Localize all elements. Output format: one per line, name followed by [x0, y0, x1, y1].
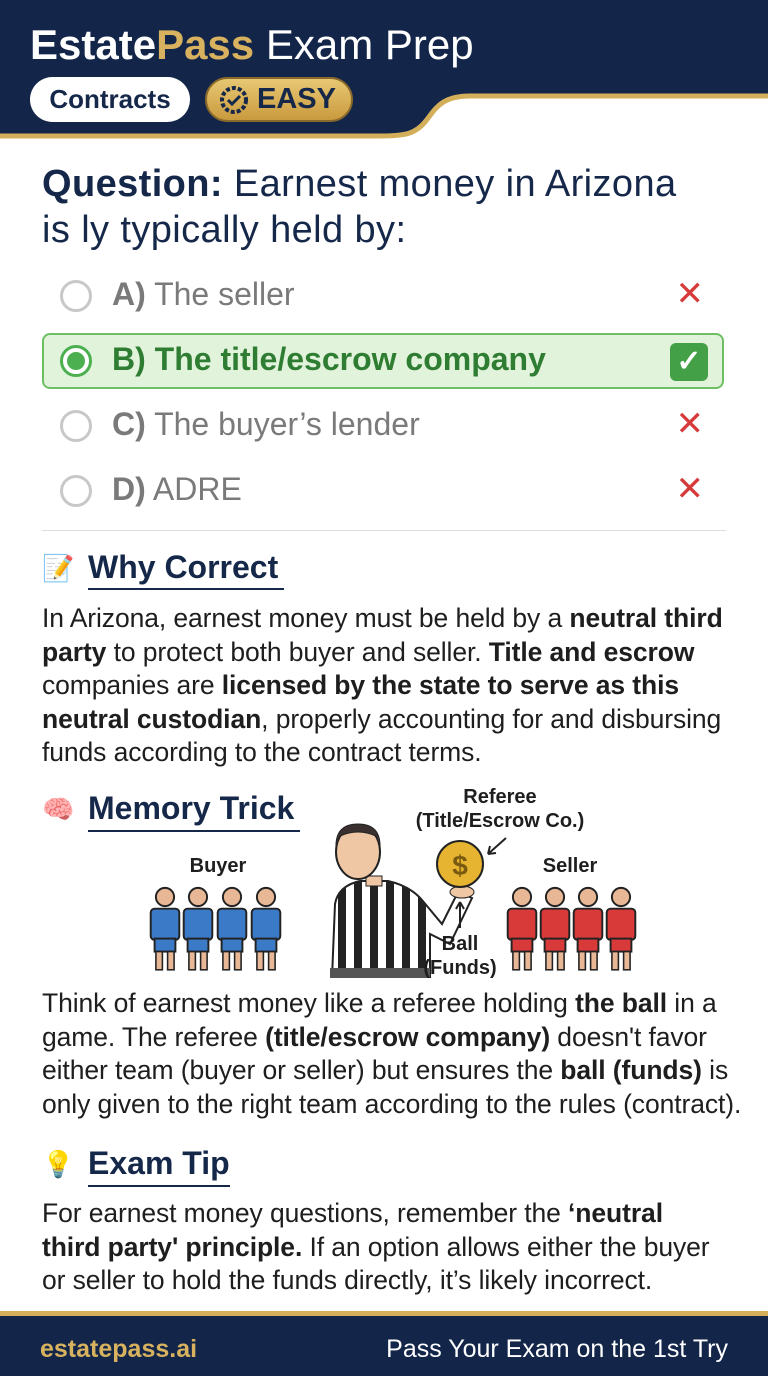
badge: Contracts — [30, 77, 190, 122]
option B correct: B) The title/escrow company — [112, 341, 546, 377]
option C: ✕ — [676, 405, 704, 443]
illustration: referee with teams: $ — [452, 850, 468, 881]
option A: ✕ — [676, 275, 704, 313]
text: why correct: neutral custodian, properly accounting for and disbursing — [42, 704, 721, 734]
option D — [60, 470, 704, 508]
heading: Exam Tip: 💡 — [42, 1149, 74, 1179]
option C — [60, 405, 704, 443]
question: is ly typically held by: — [42, 209, 406, 251]
text: why correct: funds according to the contract terms. — [42, 737, 482, 767]
heading: Why Correct — [42, 549, 284, 590]
heading: Exam Tip — [42, 1145, 230, 1187]
badge: EASY: EASY — [257, 83, 336, 115]
illustration: referee with teams: (Title/Escrow Co.) — [416, 810, 584, 832]
option A: A) The seller — [112, 276, 295, 312]
footer — [0, 1311, 768, 1376]
heading: Memory Trick: 🧠 — [42, 794, 74, 824]
badge: EASY — [205, 77, 353, 122]
illustration: referee with teams — [150, 786, 636, 978]
heading: Memory Trick: Memory Trick — [88, 790, 294, 826]
option D: D) ADRE — [112, 471, 242, 507]
illustration: referee with teams: Ball — [442, 933, 478, 955]
text: memory trick — [42, 988, 741, 1118]
footer: slogan: Pass Your Exam on the 1st Try — [386, 1335, 728, 1363]
text: why correct: In Arizona, earnest money must be held by a neutral third — [42, 603, 723, 633]
text: memory trick: either team (buyer or seller) but ensures the ball (funds) is — [42, 1055, 728, 1085]
text: exam tip: or seller to hold the funds directly, it’s likely incorrect. — [42, 1265, 652, 1295]
heading: Memory Trick — [42, 790, 300, 832]
text: exam tip: third party' principle. If an option allows either the buyer — [42, 1232, 710, 1262]
option A — [60, 275, 704, 313]
text: memory trick: only given to the right team according to the rules (contract). — [42, 1088, 741, 1118]
option D: ✕ — [676, 470, 704, 508]
text: exam tip — [42, 1198, 710, 1295]
text: why correct — [42, 603, 723, 767]
footer: site: estatepass.ai — [40, 1335, 197, 1363]
illustration: referee with teams: Referee — [463, 786, 537, 808]
text: memory trick: game. The referee (title/escrow company) doesn't favor — [42, 1022, 707, 1052]
heading: Exam Tip: Exam Tip — [88, 1145, 230, 1181]
header banner — [0, 0, 768, 138]
heading: Why Correct: 📝 — [42, 553, 74, 583]
illustration: referee with teams: Buyer — [190, 855, 247, 877]
heading: Why Correct: Why Correct — [88, 549, 278, 585]
option B correct — [42, 333, 724, 389]
illustration: referee with teams: Seller — [543, 855, 597, 877]
text: exam tip: For earnest money questions, remember the ‘neutral — [42, 1198, 663, 1228]
text: memory trick: Think of earnest money like a referee holding the ball in a — [42, 988, 717, 1018]
option B correct: ✓ — [676, 345, 702, 378]
text: why correct: party to protect both buyer and seller. Title and escrow — [42, 636, 694, 666]
badge: Contracts: Contracts — [49, 84, 171, 114]
referee — [330, 824, 474, 979]
question: Question: Earnest money in Arizona — [42, 163, 677, 205]
text: why correct: companies are licensed by the state to serve as this — [42, 670, 679, 700]
question — [42, 163, 677, 251]
option C: C) The buyer’s lender — [112, 406, 420, 442]
title: EstatePass Exam Prep — [30, 21, 474, 68]
